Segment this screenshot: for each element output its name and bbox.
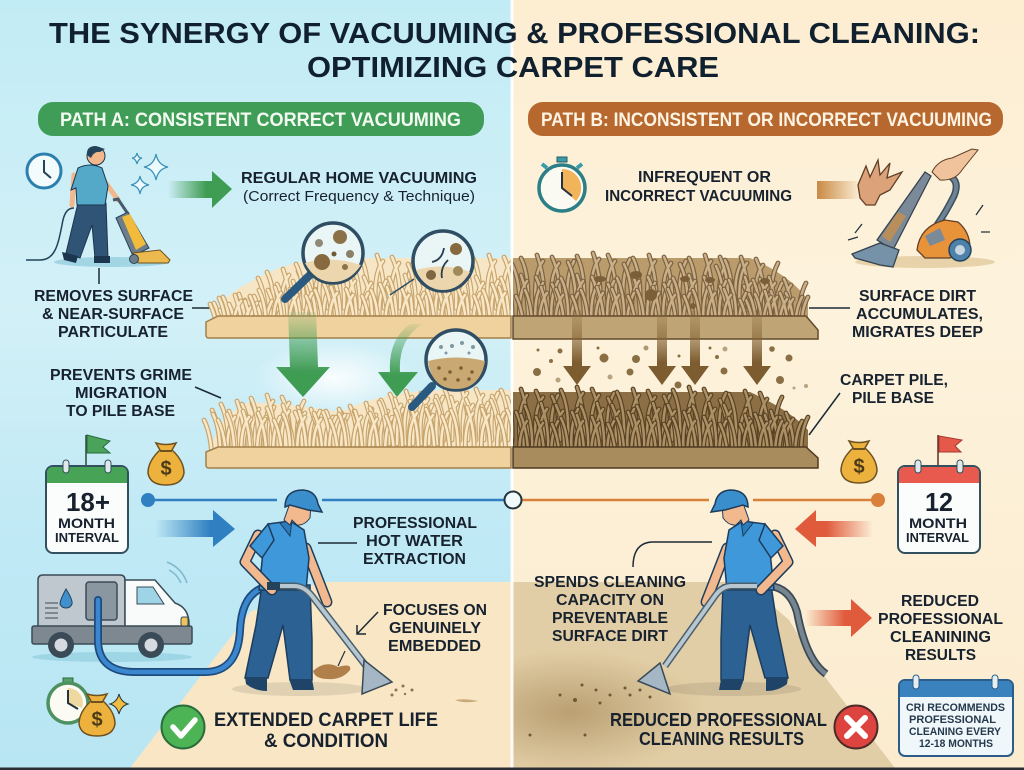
carpet: clean lower layer — [202, 386, 512, 469]
calendar: 12 month interval: INTERVAL — [906, 530, 969, 545]
magnifier: near-surface particles — [390, 231, 473, 295]
label: focuses on genuinely embedded — [383, 602, 487, 655]
callout: CRI recommendation calendar — [899, 675, 1013, 756]
label: reduced professional cleaning results: CLEANINING — [890, 629, 991, 646]
dirt particles — [533, 346, 808, 390]
extraction wand A — [267, 582, 392, 694]
label: reduced professional cleaning results — [878, 593, 1003, 664]
floor carpet: Path A — [130, 582, 512, 768]
label: professional hot water extraction: HOT WATER — [366, 533, 463, 550]
hose: Path B — [770, 586, 826, 674]
label: reduced professional cleaning results: PROFESSIONAL — [878, 611, 1003, 628]
magnifier: settled grime — [412, 330, 486, 407]
label: reduced results footer: REDUCED PROFESSIONAL — [610, 710, 827, 730]
label: focuses on genuinely embedded: GENUINELY — [389, 620, 481, 637]
label: focuses on genuinely embedded: FOCUSES ON — [383, 602, 487, 619]
title: OPTIMIZING CARPET CARE — [307, 52, 719, 84]
path A heading pill — [38, 102, 484, 136]
icon: green check — [162, 706, 204, 748]
background: right cream panel — [512, 0, 1024, 770]
background: left blue panel — [0, 0, 512, 770]
label: professional hot water extraction: PROFESSIONAL — [353, 515, 477, 532]
label: extended carpet life: EXTENDED CARPET LIFE — [214, 710, 438, 731]
label: infrequent or incorrect vacuuming — [605, 169, 792, 205]
callout: CRI recommendation calendar: PROFESSIONAL — [909, 714, 996, 726]
carpet: clean upper layer — [205, 252, 512, 339]
label: professional hot water extraction: EXTRACTION — [363, 551, 466, 568]
illustration: man vacuuming — [26, 146, 170, 267]
title — [49, 18, 980, 84]
hose: Path A — [98, 586, 270, 672]
glow: clean area — [255, 340, 415, 416]
arrow: red to technician — [795, 510, 873, 547]
label: focuses on genuinely embedded: EMBEDDED — [388, 638, 481, 655]
label: extended carpet life — [214, 710, 438, 752]
magnifier: surface particles — [285, 223, 363, 299]
label: surface dirt accumulates: MIGRATES DEEP — [852, 324, 983, 341]
arrow: vacuuming to label — [168, 171, 232, 208]
icon: stopwatch orange — [539, 157, 585, 211]
icon: money bag B — [79, 694, 115, 736]
label: reduced professional cleaning results: RESULTS — [905, 647, 976, 664]
arrow: faded brown — [817, 181, 861, 199]
arrow: curved green down — [378, 324, 422, 397]
arrow: to embedded soil — [357, 612, 378, 634]
timeline centre node — [504, 492, 522, 508]
technician: Path B — [665, 490, 801, 696]
arrow: red to result — [805, 599, 872, 637]
label: prevents grime migration: MIGRATION — [75, 385, 167, 402]
dirt scattered at nozzle — [528, 684, 652, 736]
technician: Path A — [232, 490, 368, 696]
path A heading pill: PATH A: CONSISTENT CORRECT VACUUMING — [60, 110, 461, 131]
callout: CRI recommendation calendar: CLEANING EVERY — [909, 726, 1002, 738]
icon: sparkles — [131, 153, 168, 194]
label: infrequent or incorrect vacuuming: INCORRECT VACUUMING — [605, 188, 792, 205]
label: removes surface particulate: & NEAR-SURFACE — [42, 306, 184, 323]
floor carpet: Path B — [514, 582, 894, 768]
icon: clock — [27, 154, 61, 188]
arrows: brown dirt migrating down — [563, 310, 771, 385]
label: regular home vacuuming — [241, 170, 477, 205]
arrow: blue to technician — [155, 510, 235, 547]
label: surface dirt accumulates: SURFACE DIRT — [859, 288, 976, 305]
label: spends cleaning capacity — [534, 574, 686, 645]
icon: sparkle — [110, 694, 128, 714]
calendar: 12 month interval — [898, 435, 980, 553]
arrow: large green down — [276, 312, 330, 397]
label: prevents grime migration — [50, 367, 192, 420]
label: reduced professional cleaning results: REDUCED — [901, 593, 979, 610]
label: professional hot water extraction — [353, 515, 477, 568]
label: reduced results footer — [610, 710, 827, 749]
stain on carpet — [313, 651, 478, 702]
calendar: 18+ month interval — [46, 435, 128, 553]
icon: red cross — [834, 706, 878, 748]
label: spends cleaning capacity: CAPACITY ON — [556, 592, 664, 609]
label: prevents grime migration: TO PILE BASE — [66, 403, 175, 420]
label: regular home vacuuming: (Correct Frequency & Technique) — [243, 188, 475, 205]
calendar: 18+ month interval: INTERVAL — [55, 530, 119, 545]
calendar: 18+ month interval: 18+ — [66, 487, 110, 517]
extraction wand B — [638, 586, 757, 694]
label: regular home vacuuming: REGULAR HOME VACUUMING — [241, 170, 477, 187]
carpet: dirty upper layer — [496, 253, 818, 344]
icon: money bag C — [841, 441, 877, 483]
carpet: dirty lower layer — [496, 387, 818, 468]
timeline: Path B — [522, 493, 885, 507]
bottom edge — [0, 768, 1024, 770]
icon: money bag A — [148, 443, 184, 485]
centre divider — [510, 0, 514, 768]
label: prevents grime migration: PREVENTS GRIME — [50, 367, 192, 384]
calendar: 18+ month interval: MONTH — [58, 515, 115, 531]
path B heading pill: PATH B: INCONSISTENT OR INCORRECT VACUUMING — [541, 110, 992, 131]
label: spends cleaning capacity: SURFACE DIRT — [552, 628, 668, 645]
callout: CRI recommendation calendar: CRI RECOMMENDS — [906, 702, 1005, 714]
label: spends cleaning capacity: PREVENTABLE — [552, 610, 668, 627]
callout: CRI recommendation calendar: 12-18 MONTHS — [919, 738, 993, 750]
label: reduced results footer: CLEANING RESULTS — [639, 729, 804, 749]
label: spends cleaning capacity: SPENDS CLEANING — [534, 574, 686, 591]
path B heading pill — [528, 102, 1003, 136]
label: surface dirt accumulates — [852, 288, 983, 341]
label: removes surface particulate: PARTICULATE — [58, 324, 168, 341]
title: THE SYNERGY OF VACUUMING & PROFESSIONAL CLEANING: — [49, 18, 980, 50]
icon: extraction truck — [32, 562, 192, 662]
label: infrequent or incorrect vacuuming: INFREQUENT OR — [638, 169, 771, 186]
calendar: 12 month interval: 12 — [925, 487, 953, 517]
label: removes surface particulate: REMOVES SURFACE — [34, 288, 193, 305]
label: removes surface particulate — [34, 288, 193, 341]
illustration: broken vacuum — [848, 149, 995, 268]
calendar: 12 month interval: MONTH — [909, 515, 967, 531]
label: carpet pile: CARPET PILE, — [840, 372, 948, 389]
leader: spends cleaning — [633, 542, 712, 567]
label: carpet pile: PILE BASE — [852, 390, 934, 407]
label: extended carpet life: & CONDITION — [264, 731, 388, 752]
label: carpet pile — [840, 372, 948, 407]
timeline: Path A — [141, 493, 505, 507]
label: surface dirt accumulates: ACCUMULATES, — [856, 306, 983, 323]
icon: dirty hand — [858, 160, 902, 205]
icon: stopwatch A — [48, 678, 88, 723]
